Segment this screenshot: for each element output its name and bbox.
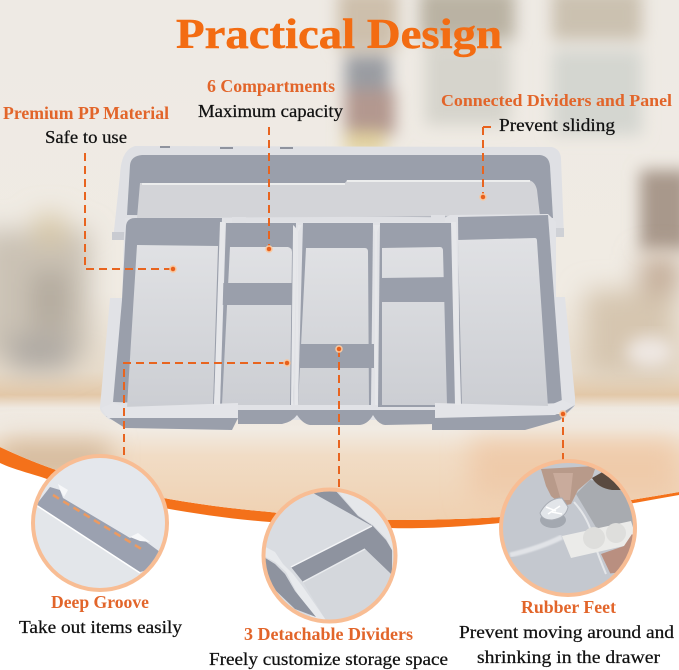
caption: deep groove: Take out items easily [19,617,182,637]
compartment 2 [220,223,296,405]
label: 6 compartments [198,76,343,121]
compartment 1 [113,218,222,407]
label: 6 compartments: 6 Compartments [207,76,335,96]
front tray body [100,214,575,430]
label: premium pp material: Premium PP Material [3,103,169,123]
leader line: connected [480,127,491,200]
left strip [262,556,316,617]
caption: rubber feet: Prevent moving around and [459,622,674,642]
circle: rubber feet [498,459,640,600]
caption: detachable dividers: Freely customize storage space [209,649,448,669]
label: premium pp material [3,103,169,147]
leader line: dividers [336,346,342,488]
caption: deep groove [19,592,182,637]
tray [100,146,575,430]
label: premium pp material: Safe to use [45,127,127,147]
compartment 3 [298,223,374,405]
blurred kitchen background [0,0,679,530]
white blob on right [626,336,674,368]
orange curved band [0,447,679,528]
back panel [112,146,564,240]
front lips [101,403,238,418]
label: connected dividers: Prevent sliding [499,115,615,135]
circle: deep groove [31,454,169,592]
label: connected dividers: Connected Dividers and Panel [441,91,672,110]
leader line: rubber feet [560,411,566,460]
label: 6 compartments: Maximum capacity [198,101,343,121]
caption: rubber feet: Rubber Feet [521,597,616,617]
leader line: premium [85,153,176,272]
bottom front shadow edges [106,408,238,430]
top right rail [339,492,393,550]
leader line: deep groove [124,360,290,458]
compartment 5 [458,215,562,407]
label: connected dividers [441,91,672,135]
caption: rubber feet: shrinking in the drawer [477,647,660,667]
compartment 4 [378,223,458,407]
dividing rails [214,222,225,405]
caption: deep groove: Deep Groove [51,592,149,612]
circle: detachable dividers [260,486,402,626]
left rail [266,548,325,620]
title: Practical Design [176,12,502,58]
top right strip [291,490,392,582]
leader line: compartments [266,127,272,252]
lower floor [365,549,391,574]
caption: rubber feet [459,597,674,667]
caption: detachable dividers: 3 Detachable Dividers [244,624,413,644]
caption: detachable dividers [209,624,448,669]
